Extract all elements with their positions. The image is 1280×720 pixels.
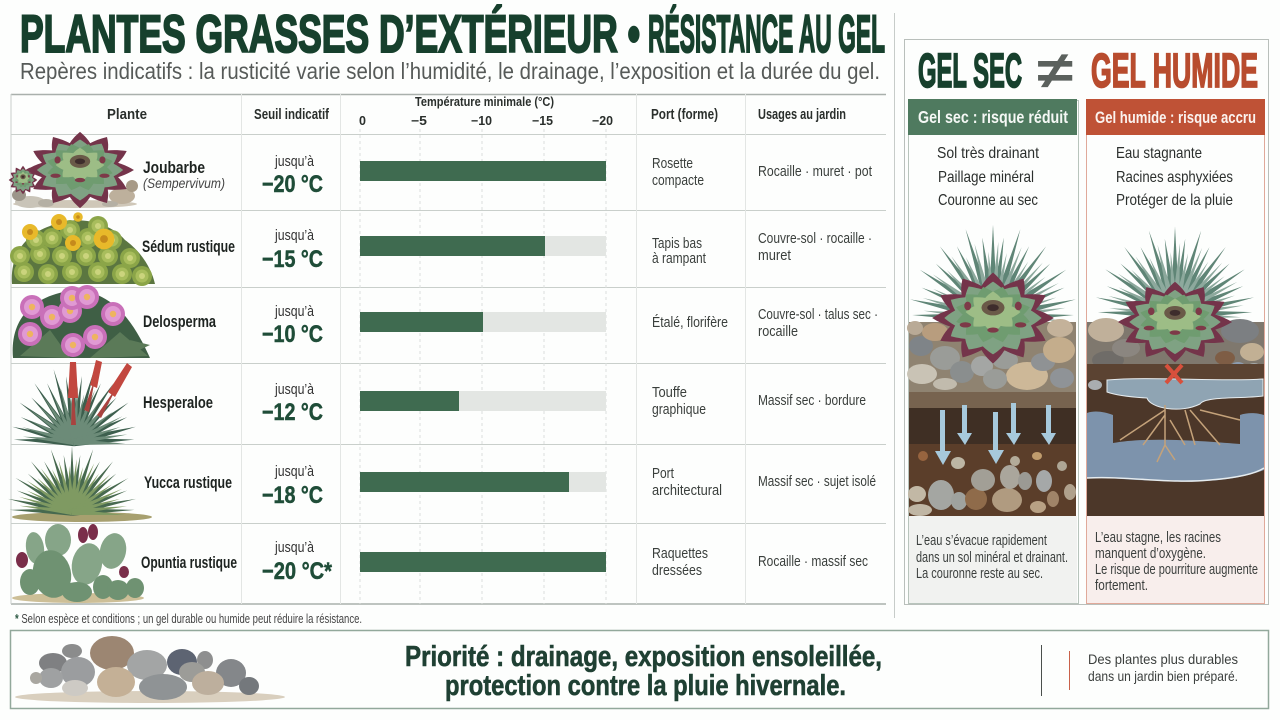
row: Hesperaloe: Touffe [652,385,687,401]
row: Hesperaloe: Hesperaloe [143,393,213,412]
row: Hesperaloe: jusqu’à [274,381,315,398]
comparison heading [918,42,1258,100]
dry list: Sol très drainant [937,145,1039,162]
icon: sedum [10,212,155,286]
wet caption: L’eau stagne, les racines [1095,530,1221,546]
dry caption [909,516,1077,603]
row: Joubarbe: Rosette [652,156,693,172]
panel: gel sec vs gel humide [904,40,1268,604]
text: RÉSISTANCE AU GEL [648,4,885,64]
wet caption: fortement. [1095,578,1148,594]
table header: Port (forme) [651,107,718,123]
row: Joubarbe: Joubarbe [143,158,205,177]
wet list: Eau stagnante [1116,145,1202,162]
comparison heading: GEL SEC [918,45,1022,98]
table header: Température minimale (°C) [415,95,554,109]
arrows: drainage [935,403,1056,465]
row: Delosperma [13,285,878,358]
row: Joubarbe: jusqu’à [274,153,315,170]
water layers [1107,379,1263,409]
row: Opuntia: jusqu’à [274,539,315,556]
dry header: Gel sec : risque réduit [918,107,1068,127]
bar: -20 [360,552,606,572]
icon: red cross [1166,365,1182,383]
comparison heading: ≠ [1037,42,1073,100]
bar: -18 [360,472,606,492]
row: Delosperma: jusqu’à [274,303,315,320]
table header: Usages au jardin [758,107,846,123]
subtitle: Repères indicatifs : la rusticité varie selon l’humidité, le drainage, l’exposition et la durée du gel. [20,58,880,84]
row: Yucca [7,446,876,522]
dry caption: L’eau s’évacue rapidement [916,533,1047,549]
bar: -15 [360,236,606,256]
row: Yucca: Port [652,466,674,482]
row: Delosperma: Étalé, florifère [652,314,728,331]
wet header [1086,99,1265,135]
closing note: Des plantes plus durables [1088,651,1238,667]
table header: −15 [532,114,553,128]
icon: rock pile [15,636,285,703]
wet list [1116,145,1233,209]
column: gel sec [907,99,1078,604]
row: Yucca: jusqu’à [274,463,315,480]
row: Sedum: −15 °C [262,246,323,273]
row: Joubarbe [9,132,872,208]
wet list: Racines asphyxiées [1116,169,1233,186]
row: Joubarbe: Rocaille · muret · pot [758,164,872,180]
priority message: Priorité : drainage, exposition ensoleillée, [405,641,882,673]
table header: −5 [411,114,427,128]
row: Sedum: à rampant [652,251,706,267]
row: Delosperma: −10 °C [262,321,323,348]
row: Hesperaloe: graphique [652,402,706,418]
icon: joubarbe rosette [9,132,138,208]
closing note: dans un jardin bien préparé. [1088,668,1238,684]
row: Yucca: −18 °C [262,482,323,509]
dry list [937,145,1039,209]
row: Yucca: Yucca rustique [144,473,232,492]
row: Sedum: Couvre-sol · rocaille · [758,231,872,247]
row: Sedum: jusqu’à [274,227,315,244]
row: Opuntia: −20 °C* [262,558,333,585]
bar: -12 [360,391,606,411]
row: Delosperma: Couvre-sol · talus sec · [758,307,878,323]
priority message [405,641,882,702]
dry list: Couronne au sec [938,192,1038,209]
row: Hesperaloe: Massif sec · bordure [758,393,866,409]
dry caption: La couronne reste au sec. [916,566,1043,582]
dry list: Paillage minéral [938,169,1034,186]
row: Joubarbe: compacte [652,173,704,189]
icon: hesperaloe [11,360,137,449]
roots [1120,405,1240,462]
row: Sedum: muret [758,248,791,264]
table header: −20 [592,114,613,128]
icon: opuntia [12,524,144,603]
row: Opuntia: Rocaille · massif sec [758,554,868,570]
row: Opuntia: Opuntia rustique [141,553,237,572]
table header: 0 [359,114,366,128]
footnote: * Selon espèce et conditions ; un gel durable ou humide peut réduire la résistance. [15,612,362,626]
row: Delosperma: Delosperma [143,312,216,331]
row: Joubarbe: −20 °C [262,171,323,198]
icon: yucca [7,446,152,522]
divider [894,13,896,618]
panel: frost resistance table [7,94,886,604]
illustration: waterlogged soil [1087,226,1264,516]
wet list: Protéger de la pluie [1116,192,1233,209]
banner: priority [10,630,1268,708]
row: Opuntia: dressées [652,563,702,579]
row: Sedum: Tapis bas [652,236,702,252]
wet caption [1087,516,1264,603]
column: gel humide [1086,99,1265,604]
row: Yucca: Massif sec · sujet isolé [758,474,876,490]
bar: -10 [360,312,606,332]
title: PLANTES GRASSES D’EXTÉRIEUR • [20,4,640,64]
row: Delosperma: rocaille [758,324,798,340]
table header: Seuil indicatif [254,107,329,123]
icon: delosperma [13,285,150,358]
dry header [908,99,1077,135]
closing note [1088,651,1238,684]
table header: −10 [471,114,492,128]
table header: Plante [107,107,147,123]
row: Sedum [10,212,872,286]
row: Hesperaloe [11,360,866,449]
wet caption: manquent d’oxygène. [1095,546,1206,562]
row: Opuntia [12,524,868,603]
row: Sedum: Sédum rustique [142,237,235,256]
illustration: drained soil [907,225,1077,516]
priority message: protection contre la pluie hivernale. [445,670,846,702]
row: Joubarbe: (Sempervivum) [143,175,225,191]
table header [107,95,846,128]
row: Yucca: architectural [652,483,722,499]
row: Hesperaloe: −12 °C [262,399,323,426]
row: Opuntia: Raquettes [652,546,708,562]
bar: -20 [360,161,606,181]
dry caption: dans un sol minéral et drainant. [916,550,1068,566]
